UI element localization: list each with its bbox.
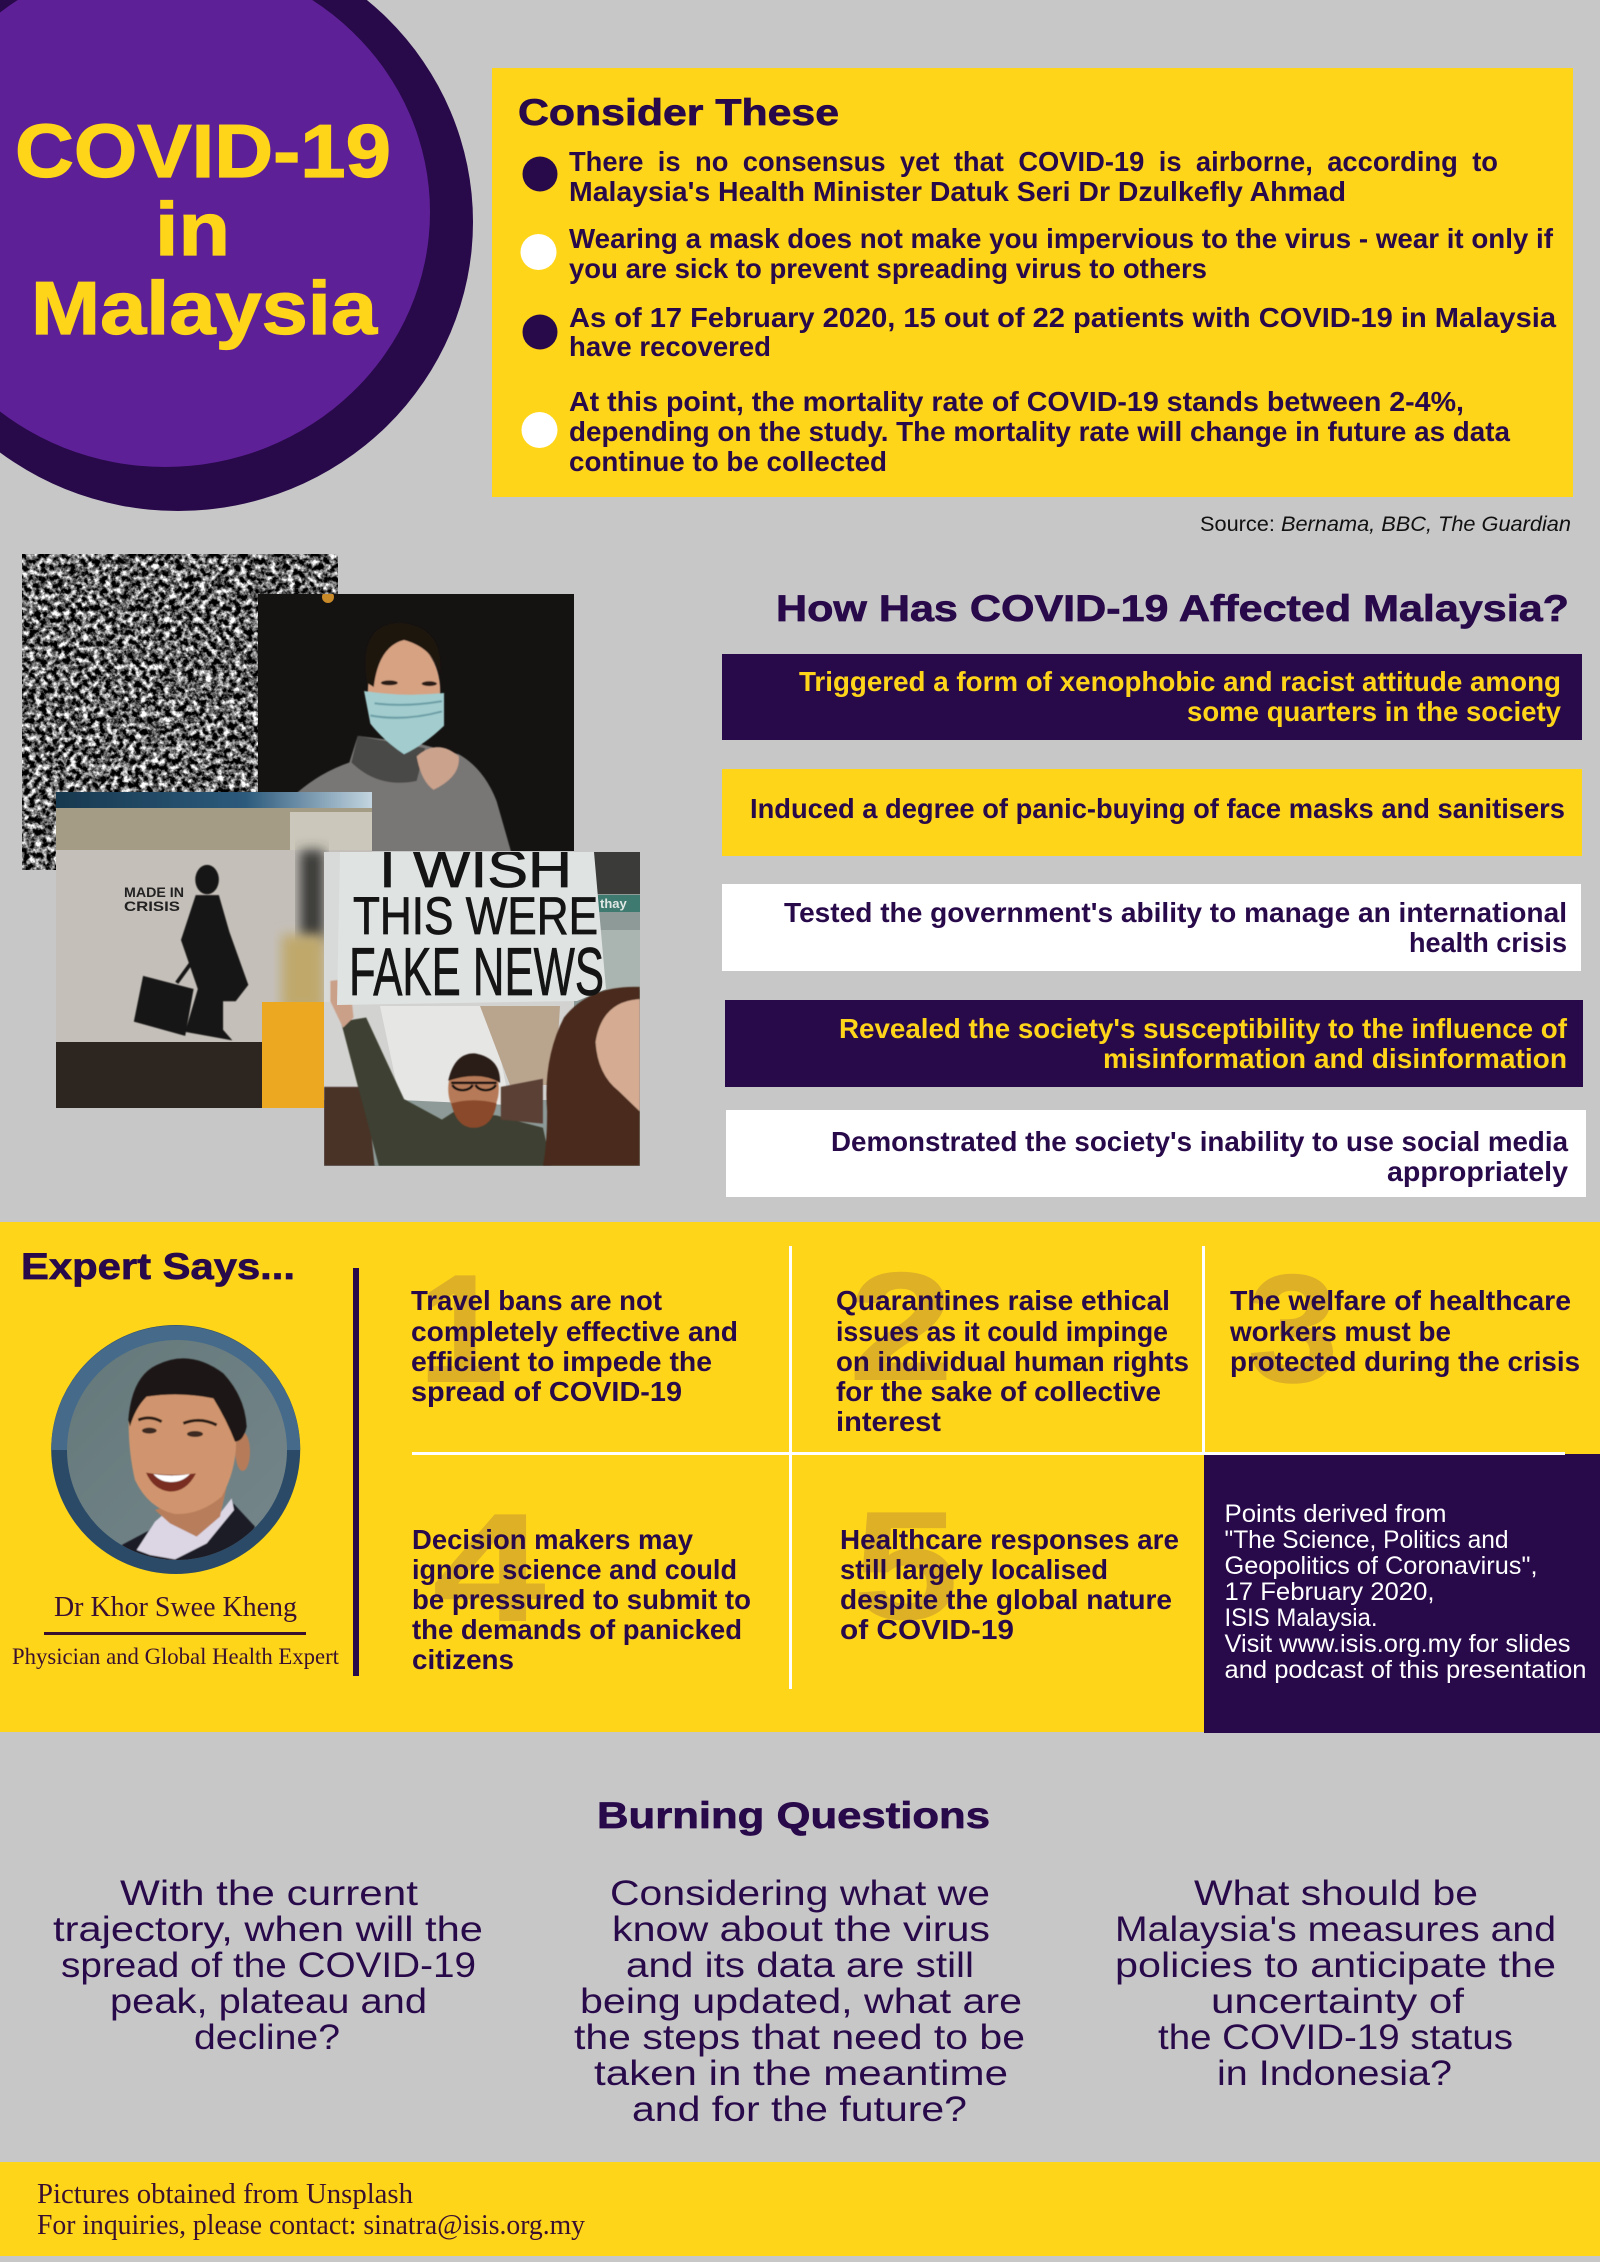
point 5: 5 — [853, 1479, 959, 1652]
point 3: 3 — [1247, 1242, 1339, 1415]
point 4: be pressured to submit to — [412, 1584, 751, 1615]
point 5: of COVID-19 — [840, 1614, 1014, 1645]
bullet point 1: Malaysia's Health Minister Datuk Seri Dr Dzulkefly Ahmad — [569, 176, 1346, 207]
bullet point 1: There is no consensus yet that COVID-19 is airborne, according to — [569, 146, 1498, 177]
name and title — [12, 1591, 340, 1669]
point 4: 4 — [432, 1481, 546, 1654]
source note box: "The Science, Politics and — [1224, 1526, 1508, 1554]
photo: wall stencil — [56, 792, 372, 1108]
source note box: and podcast of this presentation — [1224, 1656, 1586, 1684]
source note box: Visit www.isis.org.my for slides — [1224, 1630, 1570, 1658]
bullet point 2: Wearing a mask does not make you impervious to the virus - wear it only if — [569, 223, 1554, 254]
title: in — [155, 187, 230, 271]
title — [15, 109, 391, 350]
point 1: Travel bans are not — [411, 1285, 662, 1316]
question 1: With the current — [120, 1874, 418, 1913]
source note box: ISIS Malaysia. — [1224, 1604, 1378, 1632]
point 2: interest — [836, 1406, 941, 1437]
question 1: spread of the COVID-19 — [61, 1946, 476, 1985]
footer: For inquiries, please contact: sinatra@isis.org.my — [37, 2210, 585, 2241]
point 1: spread of COVID-19 — [411, 1376, 682, 1407]
bullet point 3 — [522, 302, 1556, 362]
point 2 — [836, 1240, 1189, 1437]
source line: Source: Bernama, BBC, The Guardian — [1200, 513, 1571, 536]
question 2: the steps that need to be — [574, 2018, 1025, 2057]
effect bar 4: misinformation and disinformation — [1103, 1043, 1567, 1074]
photo: fake news protest: FAKE NEWS — [349, 934, 604, 1010]
question 2: know about the virus — [612, 1910, 990, 1949]
question 2: and for the future? — [632, 2090, 967, 2129]
effect bar 2 — [722, 769, 1582, 856]
bullet point 3: have recovered — [569, 331, 771, 362]
photo: wall stencil: CRISIS — [124, 898, 180, 914]
bullet point 2 — [520, 223, 1554, 284]
name and title: Dr Khor Swee Kheng — [54, 1591, 297, 1623]
point 3 — [1229, 1242, 1580, 1415]
title badge — [0, 0, 473, 511]
point 5: still largely localised — [840, 1554, 1108, 1585]
point 4: Decision makers may — [412, 1524, 693, 1555]
question 2: and its data are still — [626, 1946, 974, 1985]
photo: fake news protest: THIS WERE — [353, 887, 598, 946]
effect bar 1: Triggered a form of xenophobic and racist attitude among — [799, 666, 1561, 697]
bullet point 4: continue to be collected — [569, 446, 887, 477]
question 2: taken in the meantime — [594, 2054, 1008, 2093]
title: Malaysia — [31, 266, 378, 350]
source note box: Points derived from — [1224, 1500, 1446, 1528]
effect bar 4: Revealed the society's susceptibility to the influence of — [839, 1013, 1568, 1044]
bullet point 3: As of 17 February 2020, 15 out of 22 patients with COVID-19 in Malaysia — [569, 302, 1556, 333]
point 1: efficient to impede the — [411, 1346, 712, 1377]
point 5: despite the global nature — [840, 1584, 1172, 1615]
photo: woman wearing mask — [258, 591, 574, 854]
photo collage — [22, 554, 640, 1166]
effect bar 5: Demonstrated the society's inability to use social media — [831, 1126, 1568, 1157]
point 4: the demands of panicked — [412, 1614, 742, 1645]
point 2: for the sake of collective — [836, 1376, 1161, 1407]
effect bar 3 — [722, 884, 1581, 971]
photo: fake news protest — [324, 841, 640, 1166]
bullet point 1 — [522, 146, 1498, 207]
footer — [0, 2162, 1600, 2256]
point 4 — [412, 1481, 751, 1675]
point 3: The welfare of healthcare — [1230, 1285, 1571, 1316]
bullet point 4 — [522, 386, 1510, 477]
question 3: uncertainty of — [1211, 1982, 1464, 2021]
effect bar 1: some quarters in the society — [1187, 696, 1561, 727]
point 1: completely effective and — [411, 1316, 738, 1347]
effect bar 3: health crisis — [1409, 927, 1567, 958]
question 2 — [574, 1874, 1025, 2129]
point 3: workers must be — [1229, 1316, 1451, 1347]
effect bar 2: Induced a degree of panic-buying of face masks and sanitisers — [750, 793, 1565, 824]
question 3 — [1115, 1874, 1556, 2093]
effect bar 1 — [722, 654, 1582, 740]
panel: expert says — [0, 1222, 1600, 1733]
question 3: policies to anticipate the — [1115, 1946, 1556, 1985]
question 2: Considering what we — [610, 1874, 990, 1913]
portrait: Dr Khor Swee Kheng — [51, 1325, 300, 1574]
source note box: 17 February 2020, — [1224, 1578, 1434, 1606]
point 4: ignore science and could — [412, 1554, 737, 1585]
question 1 — [53, 1874, 483, 2057]
panel: consider these — [492, 68, 1573, 497]
effect bar 4 — [725, 1000, 1583, 1087]
point 1: 1 — [418, 1242, 504, 1415]
footer: Pictures obtained from Unsplash — [37, 2179, 413, 2210]
bullet point 2: you are sick to prevent spreading virus to others — [569, 253, 1207, 284]
point 4: citizens — [412, 1644, 514, 1675]
point 5 — [840, 1479, 1179, 1652]
point 1 — [411, 1242, 738, 1415]
effect bar 5 — [726, 1110, 1586, 1197]
effect bar 3: Tested the government's ability to manage an international — [784, 897, 1567, 928]
photo: fake news protest: thay — [600, 896, 628, 911]
question 3: What should be — [1194, 1874, 1478, 1913]
question 1: peak, plateau and — [110, 1982, 427, 2021]
question 3: Malaysia's measures and — [1115, 1910, 1556, 1949]
point 5: Healthcare responses are — [840, 1524, 1179, 1555]
source note box: Geopolitics of Coronavirus", — [1224, 1552, 1538, 1580]
title: COVID-19 — [15, 109, 391, 193]
effect bar 5: appropriately — [1387, 1156, 1568, 1187]
point 2: 2 — [848, 1240, 954, 1413]
photo: fake news protest: I WISH — [379, 841, 572, 899]
question 3: the COVID-19 status — [1158, 2018, 1513, 2057]
heading: consider these: Consider These — [518, 92, 839, 133]
source note box — [1204, 1454, 1600, 1733]
name and title: Physician and Global Health Expert — [12, 1644, 340, 1669]
bullet point 4: At this point, the mortality rate of COVID-19 stands between 2-4%, — [569, 386, 1464, 417]
bullet point 4: depending on the study. The mortality rate will change in future as data — [569, 416, 1510, 447]
point 3: protected during the crisis — [1230, 1346, 1580, 1377]
heading: burning questions: Burning Questions — [597, 1795, 990, 1836]
question 2: being updated, what are — [580, 1982, 1022, 2021]
question 3: in Indonesia? — [1217, 2054, 1452, 2093]
photo: crowd — [22, 554, 338, 870]
point 2: on individual human rights — [836, 1346, 1189, 1377]
question 1: trajectory, when will the — [53, 1910, 483, 1949]
photo: wall stencil: MADE IN — [124, 884, 184, 900]
heading: how has covid-19 affected malaysia: How Has COVID-19 Affected Malaysia? — [776, 588, 1569, 629]
heading: expert says: Expert Says... — [21, 1246, 295, 1287]
point 2: Quarantines raise ethical — [836, 1285, 1170, 1316]
point 2: issues as it could impinge — [836, 1316, 1168, 1347]
question 1: decline? — [194, 2018, 340, 2057]
